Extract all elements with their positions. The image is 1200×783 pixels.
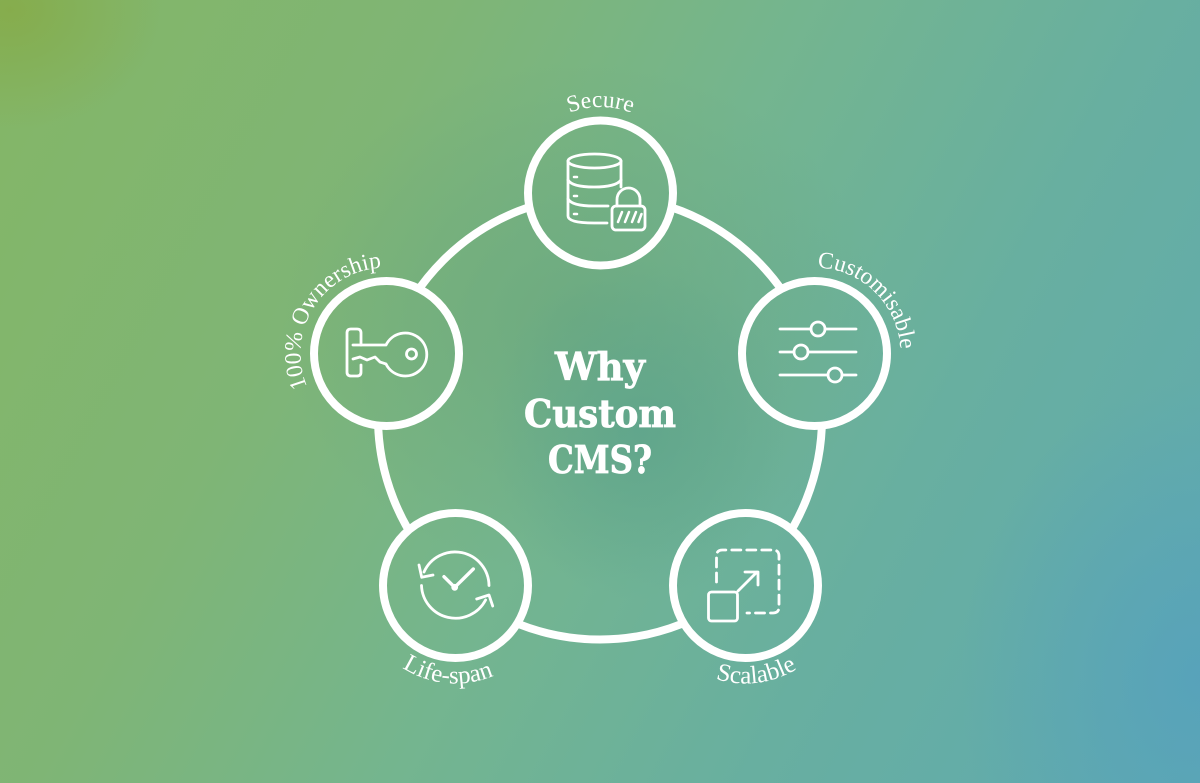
title: CMS? (548, 437, 652, 482)
label: 100% Ownership: 100% Ownership (285, 254, 380, 389)
node circle: Scalable (673, 513, 818, 658)
node circle: Secure (528, 120, 673, 266)
label: Secure: Secure (567, 95, 634, 112)
node: Customisable (738, 252, 915, 430)
node: Scalable (669, 509, 822, 684)
node: 100% Ownership (285, 254, 463, 430)
node circle: Life-span (383, 513, 528, 658)
icon: clock with circular arrows (419, 552, 493, 618)
icon: sliders (780, 322, 856, 382)
infographic diagram (285, 95, 915, 689)
node: Life-span (379, 509, 532, 689)
label: Life-span: Life-span (402, 654, 494, 689)
title: Why (554, 344, 646, 389)
icon: database with padlock (568, 154, 645, 230)
title (524, 344, 676, 482)
label: Scalable: Scalable (717, 659, 796, 684)
node: Secure (524, 95, 677, 270)
icon: key (347, 329, 427, 376)
node circle: 100% Ownership (314, 281, 459, 426)
connecting ring (378, 196, 822, 640)
icon: resize squares (708, 550, 779, 621)
title: Custom (524, 391, 676, 436)
label: Customisable: Customisable (819, 252, 915, 348)
node circle: Customisable (742, 281, 887, 426)
